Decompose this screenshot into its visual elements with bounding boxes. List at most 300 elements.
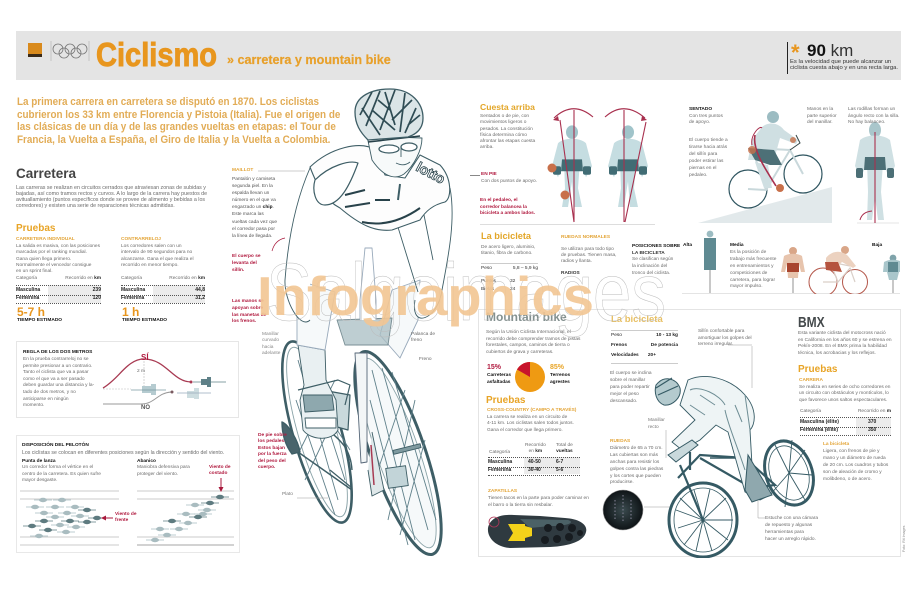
intro text: La primera carrera en carretera se disputó en 1870. Los ciclistas [17,96,319,108]
panel: regla de los dos metros [16,341,239,418]
stat: 15% [487,365,511,386]
text: rodillas [848,106,899,125]
table: Puntos [481,279,496,284]
text: la bicicleta bmx: mano y un diámetro de rueda [823,456,886,461]
heading: pruebas: Pruebas [16,223,55,234]
intro text: cubrieron los 33 km entre Florencia y Pistoia (Italia). Fue el origen de [17,109,340,121]
text: cuerpo: sobre el manillar [610,378,645,383]
table: bmx: Recorrido en m [858,409,891,414]
text: pedaleo: corredor balancea la [480,205,527,210]
stat label: TIEMPO ESTIMADO [122,318,167,323]
text: sentado: Con tres puntos [689,114,723,118]
text: cross-country [487,408,576,434]
text: manos [807,106,837,125]
label: baja: Baja [872,243,882,248]
text: pedales: los pedales. [258,439,285,444]
chart: pie terrain [514,361,546,393]
stat label: TIEMPO ESTIMADO [17,318,62,323]
text: carrera: que favorece unos saltos espectaculares. [799,398,887,403]
text: manos [232,299,266,324]
text: maillot: espalda llevan un [232,191,269,196]
legs [297,280,335,350]
text: cuerpo: pedaleo. [689,173,707,178]
text: ruedas: golpes contra las piedras [610,467,663,472]
text: cuerpo: El cuerpo tiende a [689,138,728,143]
text: pesados. La constitución [480,127,533,132]
block: carretera individual: en un sprint final. [16,269,53,274]
heading: Cuesta arriba [480,102,535,112]
text: pedales [258,432,287,470]
header band [16,31,901,80]
label: manillar: Manillar [262,332,279,337]
table: carretera individual [16,276,101,304]
text: zapatillas [488,489,589,510]
credit: Foto: Rit Images [902,526,906,552]
subtitle: » carretera y mountain bike [227,53,391,67]
stat value: 90 km [807,41,853,60]
text: forestales, campos, caminos de tierra o [486,343,570,348]
stat: 15%: 15% [487,364,501,371]
text: cross-country: 4-11 km. Los ciclistas salen todos juntos. [487,421,574,426]
text: ruedas normales: RADIOS [561,271,580,276]
jersey [310,146,450,230]
stat: 90 km [787,42,898,74]
text: la bicicleta bmx: molibdeno, o de acero. [823,477,872,482]
text: pedales: cuerpo. [258,465,275,470]
text: maillot: la línea de llegada. [232,234,272,239]
text [798,331,892,358]
table: Velocidades [611,353,639,358]
text: posiciones: tronco del ciclista. [632,271,670,276]
intro text: las clásicas de un día y de las grandes vueltas en etapas: el Tour de [17,121,336,133]
heading: REGLA DE LOS DOS METROS [23,350,92,355]
text: sillin: terreno irregular. [698,342,733,347]
table: bmx: Categoría [800,409,821,414]
text: cuerpo: piernas en el [689,166,716,171]
table: cross-country: en km [529,449,542,454]
face [367,136,422,177]
text [486,330,580,356]
text: Los ciclistas se colocan en diferentes posiciones según la dirección y sentido del viento. [22,450,224,456]
table: 32 [510,279,515,284]
text: posiciones: POSICIONES SOBRE [632,244,680,249]
label: manillar: adelante [262,351,280,356]
text: zapatillas: el barro o la tierra sin resbalar. [488,503,553,508]
text: sentado: SENTADO [689,107,712,112]
text: carrera: CARRERA [799,378,823,383]
table: bmx: Masculina (élite) [800,419,839,425]
text: media: competiciones de [730,271,767,276]
block: contrarreloj: alcanzarse. Gana el que realiza el [121,257,194,262]
text: punta de lanza: centro de la carretera. Es quien sufre [22,472,101,477]
stat: 85%: Terrenos [550,373,570,378]
text: En la prueba contrarreloj no se [23,357,89,362]
heading: DISPOSICIÓN DEL PELOTÓN [22,443,89,448]
text: recorrido debe comprender tramos de pistas [486,336,580,342]
text: la bicicleta bmx [823,442,888,483]
text: sillin: amortiguar los golpes del [698,336,752,341]
text: como el que va a ser pasado [23,377,85,382]
stat: 15%: Carreteras [487,373,511,378]
text: ruedas normales [561,235,616,276]
text: carretera body: Las carreras se realizan en circuitos cerrados que atraviesan zonas de subidas y [16,185,206,191]
shoe and leg [298,345,338,438]
front wheel [338,343,458,563]
label: si: SÍ [141,353,149,362]
block: mountain bike [486,310,591,555]
text: cuerpo: El cuerpo se [232,254,261,259]
label: maillot: MAILLOT [232,168,253,173]
table [481,263,538,293]
heading: La bicicleta [481,231,531,241]
text: carrera [799,378,890,405]
table: cross-country [488,443,580,483]
text: maillot: Pantalón y camiseta [232,177,275,182]
table: cross-country: 40-50 [528,459,541,465]
text: posiciones [632,244,680,276]
text: estuche [765,515,818,543]
text: manos: las manetas de [232,313,266,318]
text: pedaleo: bicicleta a ambos lados. [480,211,535,216]
text: estuche: Estuche con una cámara [765,516,818,521]
table: cross-country: Femenina [488,467,511,473]
illustration: mountain biker [600,340,825,558]
text: en pie: EN PIE [481,172,497,177]
block: bmx [798,314,896,482]
panel: disposicion del peloton [16,435,240,553]
block: carretera individual: Normalmente el vencedor consigue [16,263,91,268]
illustration: riders positions [682,228,900,294]
label: no: NO [141,405,150,411]
text: en pie [481,172,537,184]
table: contrarreloj: Femenina [121,295,144,301]
text: media: Media [730,243,744,248]
text: deben guardar una distancia y la- [23,383,94,388]
panel: mountain bike and BMX [478,309,901,557]
text [23,356,94,408]
illustration: shoe [486,512,590,550]
text: rodillas: ángulo recto con la silla. [848,114,899,118]
text: manos: Manos en la [807,107,833,112]
text: ruedas normales: Se utilizan para todo tipo [561,247,614,252]
text: estuche: herramientas para [765,530,804,535]
text: estuche: hacer un arreglo rápido. [765,537,816,542]
table: Bielas [481,287,494,292]
title: Ciclismo [96,36,217,73]
table: De potencia [651,343,678,348]
text: cuerpo: descansado. [610,399,637,404]
text: pedaleo: En el pedaleo, el [480,198,518,203]
table: contrarreloj: Recorrido en km [169,276,205,281]
stat caption [790,59,898,71]
label: palanca de freno [411,332,435,343]
helmet [355,89,423,140]
block: carretera individual: CARRETERA INDIVIDUAL [16,237,75,242]
label: palanca de freno: freno [411,338,422,343]
text: maillot: Este marca las [232,212,264,217]
text: movimientos ligeros o [480,120,526,125]
table: cross-country: Recorrido [525,443,546,448]
table: carretera individual: 120 [93,295,101,301]
text: Según la Unión Ciclista Internacional, el [486,330,571,335]
block: carretera individual [16,237,101,323]
table: contrarreloj: 44,8 [195,287,205,293]
text: cuerpo [232,254,261,273]
text: ruedas: y los cortes que pueden [610,474,661,479]
text: zapatillas: Tienen tacos en la parte para poder caminar en [488,496,589,501]
text: punta de lanza: mayor desgaste. [22,478,57,483]
text: maillot [232,176,277,239]
text: maillot: número en el que va [232,198,276,203]
text: maillot: el corredor pasa por [232,227,275,232]
text: maillot: vueltas cada vez que [232,220,277,225]
block: contrarreloj: intervalo de 90 segundos para no [121,250,192,255]
table: Peso [611,333,622,338]
text: cuerpo [689,138,728,178]
block: carretera individual: La salida es masiva, con las posiciones [16,244,100,249]
heading: carretera: Carretera [16,166,76,181]
heading: BMX [798,314,825,331]
text: ruedas normales: RUEDAS NORMALES [561,235,610,240]
block: contrarreloj: recorrido en menor tiempo. [121,263,179,268]
heading: pruebas: Pruebas [486,395,525,406]
panel: la bicicleta carretera [481,231,680,292]
text: pedales: De pie sobre [258,433,287,438]
frame [355,353,367,463]
illustration: main cyclist: lotto [414,159,448,187]
text: cuerpo [610,370,652,405]
text: ruedas [610,439,663,487]
heading: pruebas: Pruebas [798,364,837,375]
text: punta de lanza: Un corredor forma el vértice en el [22,465,93,470]
table: contrarreloj: Masculina [121,287,145,293]
text: carrera: un circuito con obstáculos y montículos, lo [799,391,889,396]
label: viento de costado: Viento de [209,465,231,470]
label: freno: Freno [419,357,432,362]
heading: La bicicleta [611,314,663,325]
label: viento de costado [209,464,231,476]
text: cuerpo: levanta del [232,261,257,266]
text: abanico: proteger del viento. [137,472,178,477]
text: carrera: Se realiza en series de ocho corredores en [799,385,890,390]
text: pedales: del peso del [258,459,286,464]
text: ruedas: Diámetro de 65 a 70 cm. [610,446,663,451]
text: momento. [23,403,44,408]
block: contrarreloj: Los corredores salen con un [121,244,182,249]
text: cuerpo: del sillín para [689,152,717,157]
text: estuche: de repuesto y algunas [765,523,812,528]
text: sillin: Sillín confortable para [698,329,744,334]
label: palanca de freno: Palanca de [411,332,435,337]
text: Esta variante ciclista del motocross nació [798,331,886,336]
text: la bicicleta bmx: Ligera, con frenos de pie y [823,449,880,454]
panel: cuesta arriba [480,100,655,225]
stat: 5-7 h: 5-7 h [17,305,45,319]
table: cross-country: 6-7 [556,459,563,465]
text: Sentados o de pie, con [480,114,529,119]
watermark: Infographics [257,265,594,327]
heading: Mountain bike [486,310,567,324]
text: media: Es la posición de [730,250,766,255]
text [480,114,536,150]
illustration: riders uphill [548,108,648,222]
diagram: rebase [102,358,226,404]
table: bmx [800,409,891,437]
stat: 15%: asfaltadas [487,380,510,385]
text: cuerpo: tirarse hacia atrás [689,145,727,150]
text: en California en los años 60 y se estrena en [798,338,892,343]
table: cross-country: Masculina [488,459,512,465]
label: manillar [648,417,665,431]
text: Tanto el ciclista que va a pasar [23,370,89,375]
table: carretera individual: Recorrido en km [65,276,101,281]
table: 24 [510,287,515,292]
text: ruedas normales: de pruebas. Tienen masa, [561,253,616,258]
text: carretera body [16,185,207,209]
illustration: hill [698,111,899,224]
text: posiciones: LA BICICLETA [632,251,665,256]
label: manillar: Manillar [648,418,665,423]
text: media: carretera, para lograr [730,278,775,283]
stat: 1 h: 1 h [122,305,139,319]
text: manos: Las manos se [232,299,264,304]
block: carretera individual: Gana quien llega primero. [16,257,71,262]
table [611,330,678,364]
table: cross-country: 30-40 [528,467,541,473]
diagram: peloton formations [20,478,234,546]
label: manillar [262,332,280,356]
table: bmx: 350 [868,427,876,433]
text: titanio, fibra de carbono. [481,251,532,256]
text: posiciones: la inclinación del [632,264,667,269]
table: 20+ [648,353,656,358]
table: carretera individual: 239 [93,287,101,293]
text: anticiparse en ningún [23,397,69,402]
intro text: Francia, la Vuelta a España, el Giro de Italia y la Vuelta a Colombia. [17,134,330,146]
label: viento de frente: frente [115,518,128,523]
table: 5,8 – 5,9 kg [513,266,538,271]
text: rodillas: Las rodillas forman un [848,107,895,112]
text: cross-country: La carrera se realiza en un circuito de [487,414,567,420]
label: viento de frente [115,512,137,523]
table: Frenos [611,343,627,348]
table: bmx: 370 [868,419,876,425]
block: contrarreloj [121,237,205,323]
label: 2 m: 2 m [137,369,145,374]
text: sentado: de apoyo. [689,120,710,125]
rear wheel [268,335,366,529]
text: afrontar las etapas cuesta [480,139,535,144]
text: maillot: engarzado un chip. [232,205,274,210]
text: ruedas: anchas para resistir los [610,460,659,465]
text: zapatillas: ZAPATILLAS [488,489,517,494]
text: media: en entrenamientos y [730,264,773,269]
table: 10 - 13 kg [656,333,678,338]
text: carretera body: corredores) y existen una serie de reparaciones técnicas admitidas. [16,203,175,209]
stat: 85%: 85% [550,364,564,371]
text: la bicicleta bmx: son de aleación de cromo y [823,470,882,475]
text: manos: los frenos. [232,319,256,324]
text: abanico: Maniobra defensiva para [137,465,190,470]
labels: main cyclist [232,168,328,498]
panel: sentado [689,106,899,224]
text: maillot: segunda piel. En la [232,184,273,189]
text: Pekín-2008. En el BMX prima la habilidad [798,344,887,349]
text: De acero ligero, aluminio, [481,245,535,250]
leader lines [258,170,328,498]
text: sillin [698,329,752,349]
text [481,244,535,256]
text: cuerpo: poder estirar las [689,159,723,164]
label: viento de frente: Viento de [115,512,137,517]
arms [285,168,310,322]
table: cross-country: Total de [556,443,573,448]
text: cross-country: Gana el corredor que llega primero. [487,428,563,432]
table: carretera individual: Categoría [16,276,37,281]
text: técnica, los acrobacias y los reflejos. [798,351,876,356]
label: viento de costado: costado [209,471,227,476]
stat caption: Es la velocidad que puede alcanzar un [790,59,891,65]
text: tado de dos metros, y no [23,390,76,395]
text: abanico [137,458,190,477]
text: en pie: Con dos puntos de apoyo. [481,179,537,184]
block: la bicicleta mountain [610,312,690,488]
text: cuerpo: sillín. [232,268,244,273]
block: carretera individual: marcadas por el ranking mundial. [16,250,87,255]
intro text [17,96,340,146]
text: física determina cómo [480,133,527,138]
icon: pictogram [28,43,42,57]
table: contrarreloj: 31,2 [195,295,205,301]
text: arriba. [480,145,494,150]
text: cubiertos de grava y carreteras. [486,350,553,354]
label: manillar: curvado [262,338,279,343]
text: la bicicleta bmx: La bicicleta [823,442,849,447]
stat caption: ciclista cuesta abajo y en una recta larga. [790,65,898,71]
text: punta de lanza [22,458,101,483]
text: permite presionar a un contrario. [23,364,92,369]
text: manos: del manillar. [807,120,833,125]
text: sentado [689,107,723,125]
text: manos: apoyan sobre [232,306,263,311]
text: cross-country: CROSS-COUNTRY (CAMPO A TRAVÉS) [487,408,576,413]
text: ruedas normales: radios y llanta. [561,259,592,264]
table: contrarreloj: Categoría [121,276,142,281]
text: abanico: Abanico [137,459,156,464]
text: carretera body: bajadas, así como tramos rectos y curvos. A lo largo de la carrera hay puestos de [16,191,207,197]
text: cuerpo: El cuerpo se inclina [610,371,652,376]
label: alta: Alta [683,243,692,248]
text: posiciones: Se clasifican según [632,257,673,262]
text: rodillas: No hay balanceo. [848,120,885,125]
text: ruedas: Las cubiertas son más [610,453,658,458]
panel: carretera [16,166,207,323]
stat: 85% [550,365,570,386]
text: media: trabajo más frecuente [730,257,776,262]
table: contrarreloj [121,276,205,304]
table: cross-country: 5-6 [556,467,563,473]
table: carretera individual: Femenina [16,295,39,301]
text: ruedas: producirse. [610,480,634,485]
icon: asterisk: * [791,40,800,65]
text: punta de lanza: Punta de lanza [22,459,56,464]
text: media: mayor impulso. [730,284,763,289]
block: contrarreloj: CONTRARRELOJ [121,237,161,242]
text: pedales: por la fuerza [258,452,287,457]
text: ruedas: RUEDAS [610,439,630,444]
line: en pie [470,174,480,177]
label: manillar: hacia [262,345,273,350]
